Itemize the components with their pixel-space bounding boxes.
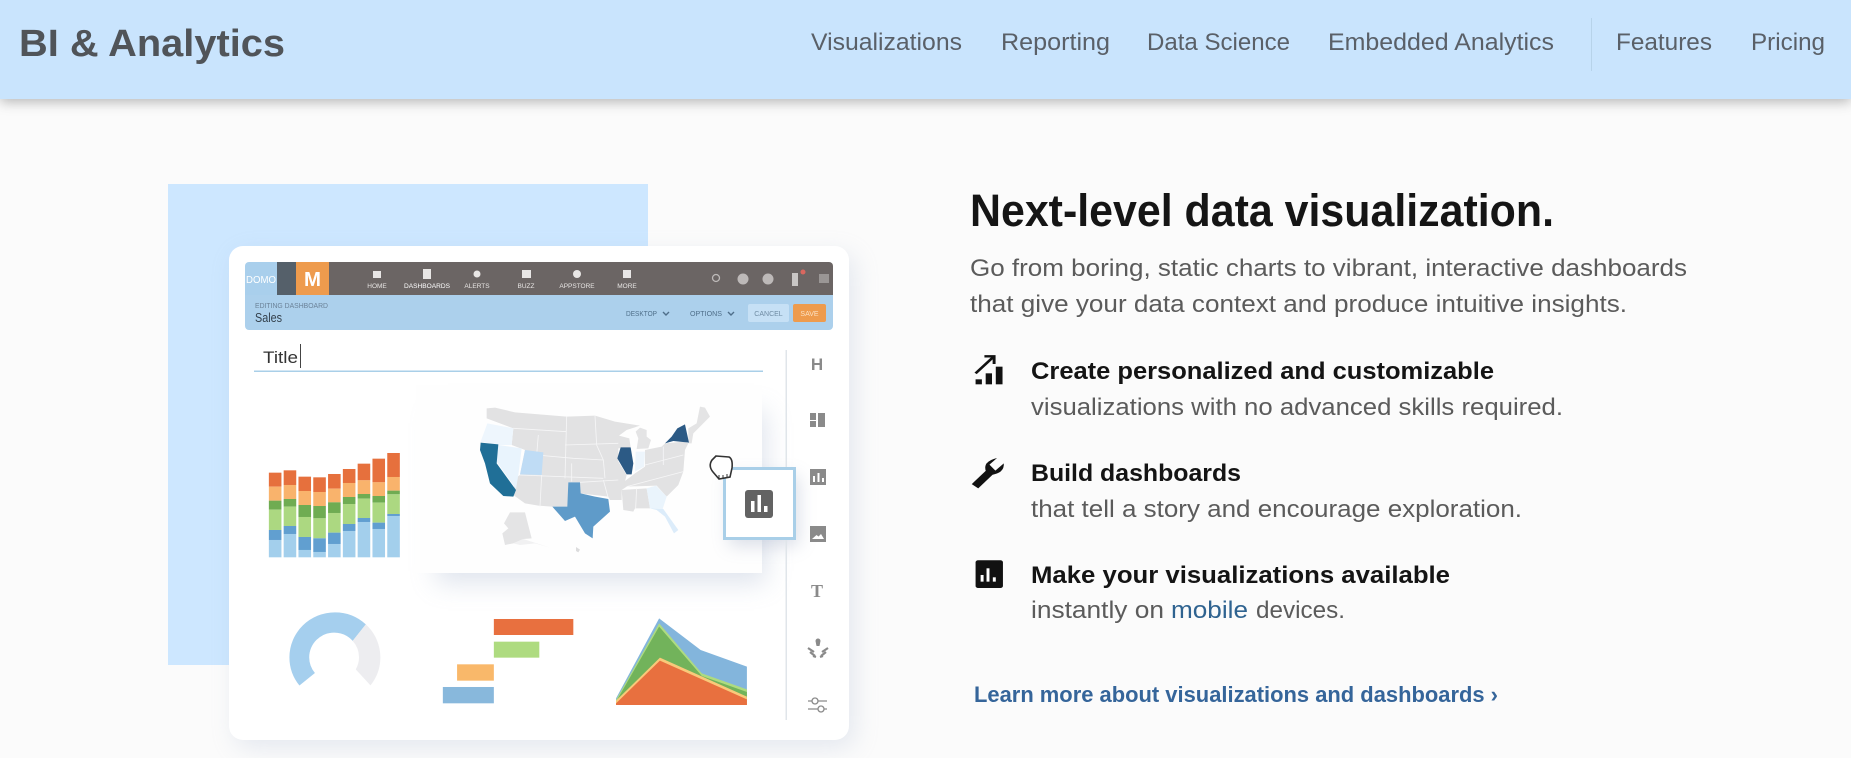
dashboard top navigation bar: M xyxy=(304,269,321,291)
dashboard editing bar: DESKTOP xyxy=(626,311,657,318)
header title: BI & Analytics xyxy=(19,23,285,65)
dashboard editing bar: Sales xyxy=(255,310,282,325)
sidebar tool icons xyxy=(808,355,828,712)
icon: bar chart square xyxy=(976,560,1003,588)
US map xyxy=(480,407,710,552)
feature 2 text: that tell a story and encourage exploration. xyxy=(1031,496,1522,523)
feature 2 text: Build dashboards xyxy=(1031,460,1241,487)
icon: hand cursor xyxy=(710,456,732,479)
feature 3 text: devices. xyxy=(1256,597,1345,624)
toolbar divider xyxy=(786,350,787,720)
feature 3 text: Make your visualizations available xyxy=(1031,562,1450,589)
feature 2 text xyxy=(1031,460,1522,523)
feature 1 text: Create personalized and customizable xyxy=(1031,358,1494,385)
feature 3 text: mobile xyxy=(1171,597,1248,624)
dashboard editing bar: EDITING DASHBOARD xyxy=(255,303,328,310)
dashboard top navigation bar: MORE xyxy=(617,283,637,290)
feature 3 text xyxy=(1031,562,1450,624)
heading: Next-level data visualization. xyxy=(970,185,1554,236)
header navigation: Visualizations xyxy=(811,29,962,56)
dashboard top navigation bar xyxy=(245,262,833,295)
dashboard editing bar: OPTIONS xyxy=(690,311,722,318)
dashboard top navigation bar: APPSTORE xyxy=(559,283,595,290)
dragged chart tile with icon xyxy=(724,468,794,538)
title input: Title xyxy=(263,348,298,367)
dashboard top navigation bar: DOMO xyxy=(246,275,276,286)
dashboard editing bar: SAVE xyxy=(800,311,819,318)
icon: growth chart xyxy=(976,356,1003,384)
donut gauge xyxy=(289,612,380,685)
dashboard top navigation bar: ALERTS xyxy=(464,283,490,290)
sidebar tool icons: H xyxy=(811,355,823,374)
light blue backdrop square xyxy=(168,184,648,665)
dashboard editing bar xyxy=(245,295,833,330)
header navigation: Features xyxy=(1616,29,1712,56)
stacked bar chart xyxy=(269,453,400,557)
header background bar xyxy=(0,0,1851,99)
horizontal diverging bar chart xyxy=(443,619,573,703)
header navigation: Pricing xyxy=(1751,29,1825,56)
map panel xyxy=(416,385,762,573)
sidebar tool icons: T xyxy=(811,581,823,601)
dashboard card xyxy=(229,246,849,740)
intro paragraph: that give your data context and produce intuitive insights. xyxy=(970,291,1627,318)
feature 3 text: instantly on xyxy=(1031,597,1164,624)
header navigation xyxy=(811,18,1825,71)
area chart xyxy=(616,618,747,705)
icon: wrench xyxy=(978,458,1004,484)
dashboard editing bar: CANCEL xyxy=(754,311,783,318)
dashboard top navigation bar: BUZZ xyxy=(518,283,535,290)
header navigation: Embedded Analytics xyxy=(1328,29,1554,56)
learn more link: Learn more about visualizations and dashboards › xyxy=(974,682,1498,707)
dragged tile shadow xyxy=(724,468,794,538)
intro paragraph xyxy=(970,255,1687,318)
header navigation: Reporting xyxy=(1001,29,1110,56)
dashboard top navigation bar: DASHBOARDS xyxy=(404,283,451,290)
feature 1 text: visualizations with no advanced skills required. xyxy=(1031,394,1563,421)
dashboard top navigation bar: HOME xyxy=(367,283,387,290)
feature 1 text xyxy=(1031,358,1563,421)
header navigation: Data Science xyxy=(1147,29,1290,56)
intro paragraph: Go from boring, static charts to vibrant, interactive dashboards xyxy=(970,255,1687,282)
